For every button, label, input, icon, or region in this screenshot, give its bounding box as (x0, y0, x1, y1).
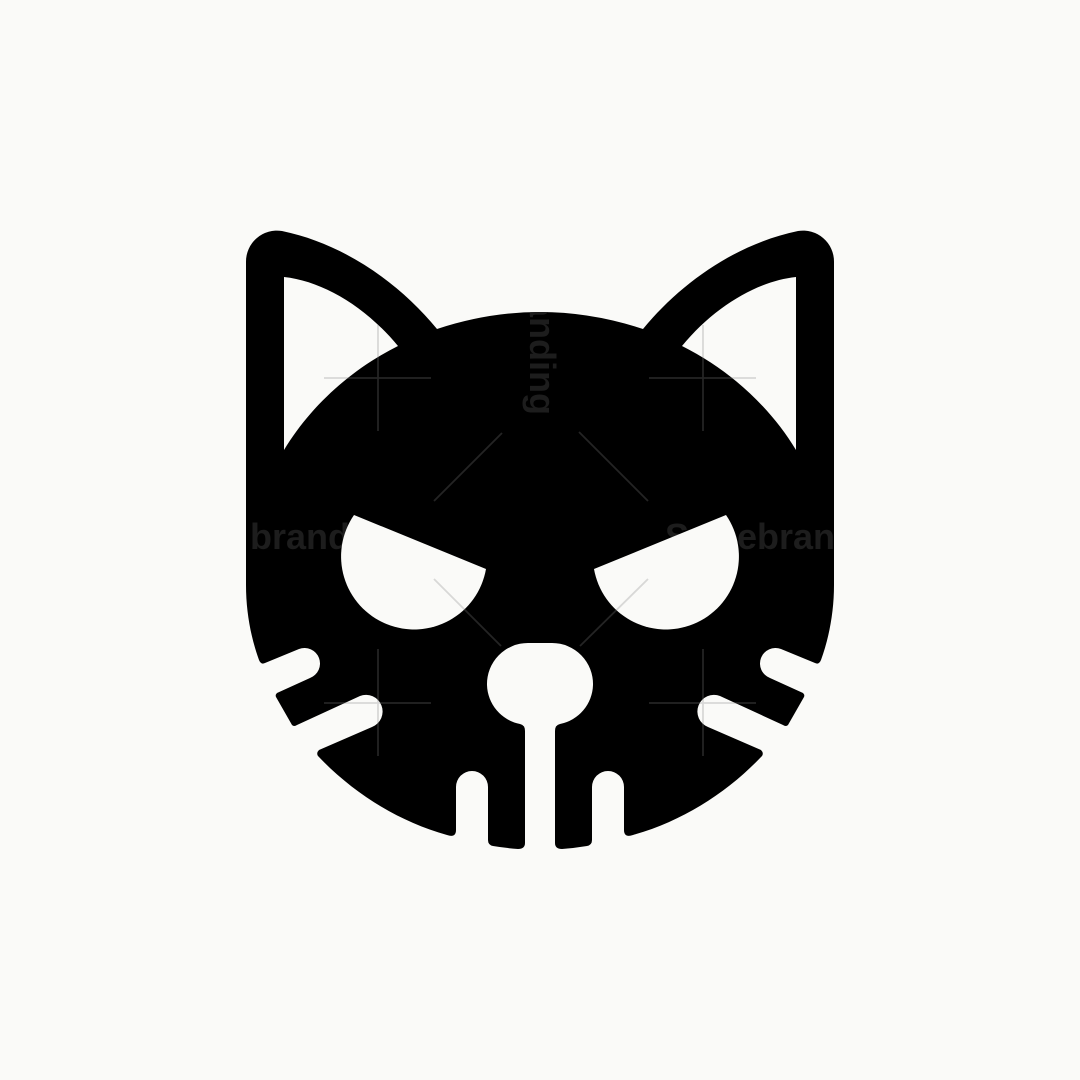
watermark text: ebrand (737, 516, 857, 557)
right eye (594, 515, 739, 629)
left eye (341, 515, 486, 629)
watermark text: branding (522, 261, 563, 415)
cat logo (246, 231, 857, 849)
left ear opening (284, 277, 398, 450)
right ear opening (682, 277, 796, 450)
watermark guide lines (324, 325, 756, 756)
cat head silhouette (246, 231, 834, 849)
watermark text: S (665, 516, 689, 557)
watermark text (250, 261, 857, 557)
watermark text: brand (250, 516, 350, 557)
